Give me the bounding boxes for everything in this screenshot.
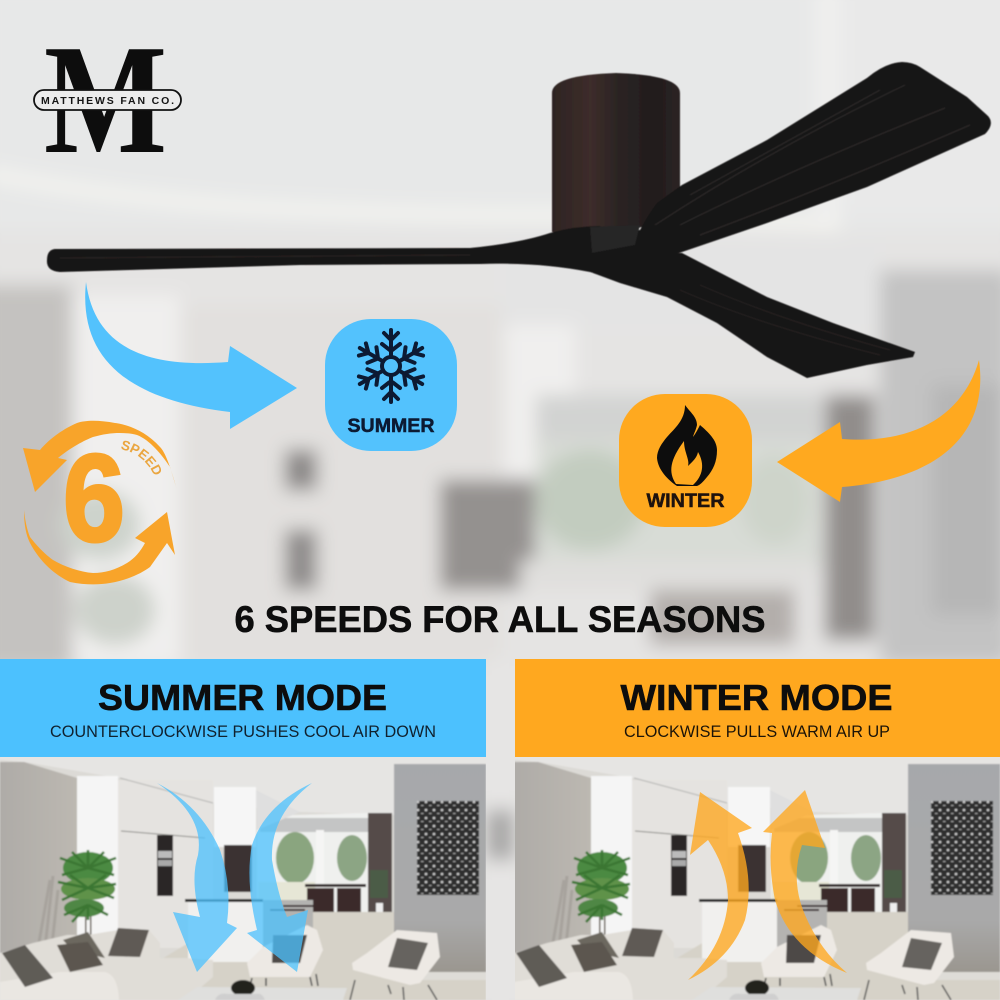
summer label: SUMMER xyxy=(348,416,435,437)
winter description: CLOCKWISE PULLS WARM AIR UP xyxy=(624,723,890,741)
numeral six: 6 xyxy=(63,430,125,568)
icon: snowflake xyxy=(355,330,427,402)
icon: six speed rotation xyxy=(23,420,176,584)
ceiling fan xyxy=(47,62,991,378)
airflow arrows: down xyxy=(157,783,312,972)
airflow arrows: up xyxy=(688,790,847,980)
arrow: winter airflow xyxy=(777,360,980,502)
fan hub bracket xyxy=(590,225,640,253)
left blade xyxy=(47,226,615,278)
panel: winter mode xyxy=(514,659,1000,1000)
room photo: winter xyxy=(514,757,1000,1000)
brand logo: Matthews Fan Co.: MATTHEWS FAN CO. xyxy=(41,95,174,107)
upper rotating arrow xyxy=(23,421,177,492)
arrow: summer airflow xyxy=(85,282,297,429)
summer description: COUNTERCLOCKWISE PUSHES COOL AIR DOWN xyxy=(50,723,436,741)
summer badge xyxy=(325,319,457,451)
panel: summer mode xyxy=(0,659,486,1000)
icon: flame xyxy=(657,405,717,486)
lower rotating arrow xyxy=(24,510,175,584)
main heading: 6 SPEEDS FOR ALL SEASONS xyxy=(234,599,766,640)
winter label: WINTER xyxy=(646,491,725,512)
winter header band xyxy=(515,659,1000,757)
winter badge xyxy=(619,394,752,527)
speed label: SPEED xyxy=(121,440,161,474)
upper right blade xyxy=(590,62,991,268)
summer heading: SUMMER MODE xyxy=(98,677,387,718)
lower right blade xyxy=(590,253,915,378)
summer header band xyxy=(0,659,486,757)
winter heading: WINTER MODE xyxy=(620,677,892,718)
room photo: summer xyxy=(0,757,486,1000)
brand logo: Matthews Fan Co.: M xyxy=(44,12,167,186)
fan motor housing xyxy=(552,73,680,240)
